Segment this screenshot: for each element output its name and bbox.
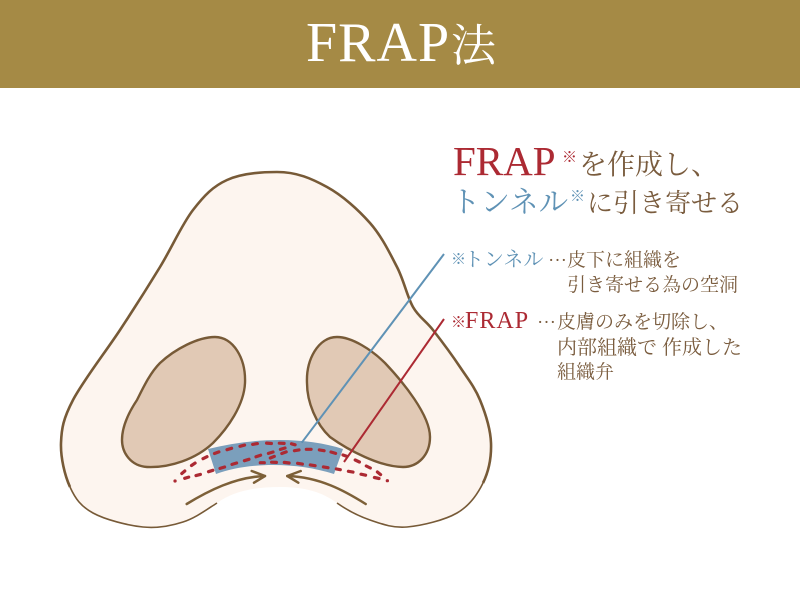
note: FRAP: ※ [451, 311, 466, 332]
note: FRAP: FRAP [465, 308, 529, 334]
red leader line [344, 319, 444, 462]
header band [0, 0, 800, 88]
tunnel area [208, 440, 343, 474]
note: tunnel [451, 246, 738, 296]
note: FRAP [451, 308, 742, 383]
right nostril [307, 337, 430, 467]
left nostril [122, 337, 245, 467]
right arrow [287, 471, 366, 504]
note: tunnel: 引き寄せる為の空洞 [567, 275, 738, 296]
title: FRAP [306, 12, 450, 74]
nose body [61, 172, 491, 527]
note: FRAP: 皮膚のみを切除し、 [557, 312, 728, 333]
note: FRAP: … [537, 308, 556, 335]
title: 法 [451, 21, 496, 71]
heading: に引き寄せる [587, 189, 743, 218]
heading: を作成し、 [579, 150, 719, 181]
heading: FRAP [453, 138, 556, 184]
note: tunnel: … [548, 246, 567, 273]
note: tunnel: ※ [451, 248, 466, 269]
left arrow [187, 471, 265, 504]
note: FRAP: 内部組織で作成した [557, 337, 742, 359]
note: tunnel: 皮下に組織を [567, 250, 681, 271]
heading [451, 138, 743, 219]
flap incision dashes [175, 443, 387, 481]
note: tunnel: トンネル [464, 249, 543, 271]
blue leader line [302, 254, 444, 443]
note: FRAP: 組織弁 [557, 362, 614, 383]
heading: ※ [570, 185, 585, 206]
heading: トンネル [451, 187, 568, 219]
heading: ※ [562, 146, 577, 167]
